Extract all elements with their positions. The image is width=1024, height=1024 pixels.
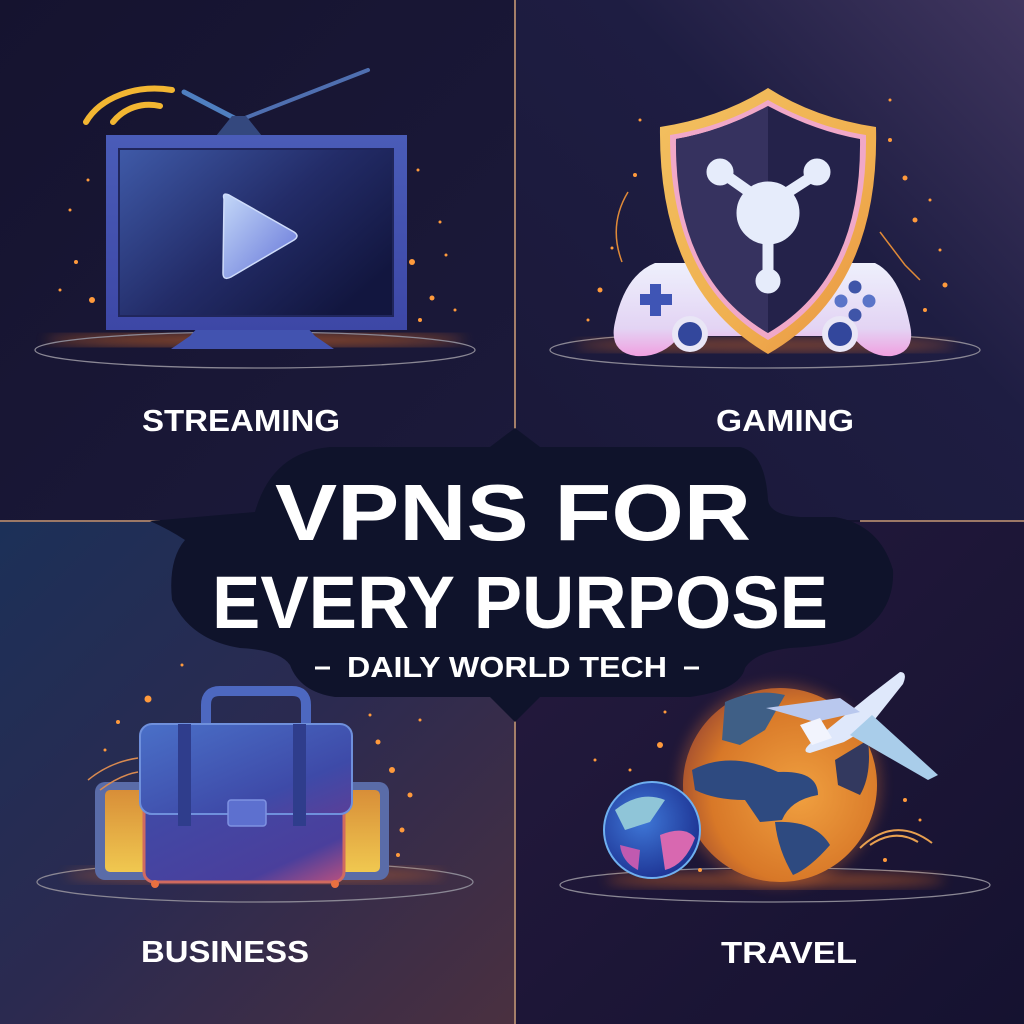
sparks: travel bbox=[594, 710, 922, 872]
icon: network node bbox=[707, 159, 830, 293]
panel: gaming background bbox=[516, 0, 1024, 520]
icon: side tablets bbox=[95, 782, 389, 880]
tv stand bbox=[171, 325, 334, 349]
panel label: gaming: GAMING bbox=[716, 403, 854, 438]
title banner bbox=[150, 428, 893, 722]
banner shape bbox=[150, 428, 893, 722]
subtitle dashes bbox=[315, 666, 699, 670]
icon: game controller and shield bbox=[550, 88, 980, 368]
panel label: travel: TRAVEL bbox=[721, 935, 857, 970]
icon: streaming television bbox=[35, 70, 475, 368]
tv screen bbox=[119, 149, 393, 316]
panel: business background bbox=[0, 522, 514, 1024]
panel label: streaming: STREAMING bbox=[142, 403, 340, 438]
sparks: streaming bbox=[58, 168, 456, 322]
icon: controller bbox=[614, 263, 911, 356]
icon: wifi arcs bbox=[86, 89, 172, 122]
icon: briefcase bbox=[37, 691, 473, 902]
icon: play button bbox=[223, 194, 297, 278]
title line 1: VPNS FOR bbox=[275, 468, 751, 557]
subtitle: DAILY WORLD TECH bbox=[347, 652, 667, 684]
icon: travel globes and plane bbox=[560, 672, 990, 902]
title line 2: EVERY PURPOSE bbox=[212, 561, 828, 644]
briefcase handle bbox=[206, 691, 306, 725]
icon: antenna bbox=[184, 70, 368, 136]
panel label: business: BUSINESS bbox=[141, 934, 309, 969]
briefcase flap bbox=[140, 724, 352, 814]
icon: large globe bbox=[683, 688, 877, 882]
icon: airplane bbox=[766, 672, 938, 780]
tv frame bbox=[106, 135, 407, 330]
briefcase lower body bbox=[144, 790, 344, 882]
sparks: gaming bbox=[586, 98, 948, 322]
briefcase clasp bbox=[228, 800, 266, 826]
sparks: business bbox=[104, 664, 422, 857]
icon: small globe bbox=[604, 782, 700, 878]
panel: travel background bbox=[516, 522, 1024, 1024]
panel: streaming background bbox=[0, 0, 514, 520]
icon: shield bbox=[660, 88, 876, 354]
